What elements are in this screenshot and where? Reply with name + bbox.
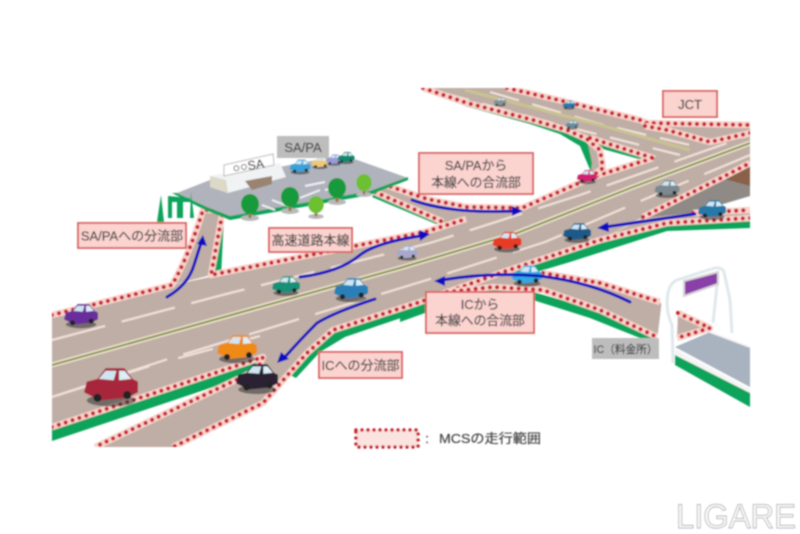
label: IC toll <box>592 338 659 359</box>
car: pink <box>577 170 597 184</box>
car: orange <box>217 335 257 363</box>
arrow: entrance <box>597 214 695 232</box>
trees <box>241 174 372 221</box>
building <box>210 163 286 193</box>
label: IC branch <box>319 352 402 378</box>
lot border <box>172 177 408 220</box>
lane markings <box>52 92 750 397</box>
parking stripes <box>262 182 345 210</box>
label: IC merge <box>426 292 534 333</box>
green verge: SA/PA exit <box>372 192 445 224</box>
car: gray <box>654 180 680 198</box>
building entrance <box>245 176 272 190</box>
green verge: JCT <box>423 88 596 172</box>
green verge: lower edge <box>290 218 750 378</box>
MCS range dotted edges <box>52 88 750 447</box>
car: red <box>492 232 522 252</box>
parking lot <box>177 155 408 217</box>
building sign: ○○SA <box>232 157 266 175</box>
label: IC branch: ICへの分流部 <box>321 358 400 373</box>
toll gate road stub <box>676 316 701 335</box>
median strip <box>52 90 750 365</box>
parked cars <box>290 152 354 175</box>
car: dark blue <box>563 223 591 243</box>
label: JCT <box>663 91 717 117</box>
car: JCT blue <box>562 100 576 110</box>
gantry <box>667 268 732 363</box>
building sign <box>224 154 274 176</box>
car: dark red <box>84 368 138 406</box>
label: SA/PA merge: 本線への合流部 <box>431 175 521 190</box>
IC merge ramp <box>474 271 662 334</box>
main road <box>52 133 750 447</box>
green verge: SA/PA ramp <box>214 225 224 272</box>
green verge: JCT branch <box>598 143 642 160</box>
car: teal <box>272 276 300 296</box>
gantry sign <box>684 272 718 296</box>
JCT loop ramp <box>587 144 600 172</box>
car: lavender <box>396 246 418 261</box>
toll plaza edge <box>675 349 750 394</box>
arrow: to SA/PA <box>167 235 207 297</box>
panel: toll gate <box>656 268 750 407</box>
green verge: main road <box>52 357 263 441</box>
car: JCT steel <box>566 120 578 130</box>
car: cyan <box>512 266 542 287</box>
label: SA/PA branch: SA/PAへの分流部 <box>81 228 183 244</box>
label: SA/PA merge <box>419 153 533 194</box>
cypress hedge <box>157 192 194 222</box>
embankment <box>650 178 751 218</box>
label: IC toll: IC（料金所） <box>594 342 658 356</box>
legend <box>356 430 541 447</box>
car: black <box>236 364 278 394</box>
arrow: IC merge <box>434 275 630 302</box>
label: SA/PA <box>277 136 329 158</box>
gantry pillar shield <box>656 293 674 363</box>
panel: SA/PA facility <box>157 152 408 222</box>
SA/PA exit road <box>380 188 494 223</box>
car: blue <box>334 278 368 302</box>
blue flow arrows <box>167 200 695 363</box>
arrow: to IC <box>277 299 375 363</box>
cars on road <box>64 97 726 406</box>
label: expressway main line: 高速道路本線 <box>271 233 350 248</box>
green verge: IC ramp <box>400 288 657 338</box>
legend: MCSの走行範囲 <box>439 431 541 446</box>
panel: road scene <box>52 88 750 447</box>
car: purple <box>64 304 98 328</box>
label: IC merge: 本線への合流部 <box>435 313 525 328</box>
JCT road <box>423 88 750 157</box>
label: SA/PA merge: SA/PAから <box>445 158 507 173</box>
car: blue right <box>698 200 726 220</box>
legend: : <box>425 431 429 446</box>
arrow: SA/PA merge <box>412 200 523 216</box>
label: expressway main line <box>269 228 352 252</box>
label: IC merge: ICから <box>461 297 499 312</box>
arrow: main line <box>300 230 430 277</box>
entrance ramp from right <box>614 212 751 234</box>
label: SA/PA: SA/PA <box>284 140 322 155</box>
toll plaza surface <box>675 332 750 387</box>
SA/PA access ramp <box>176 212 219 284</box>
label: SA/PA branch <box>78 223 186 248</box>
label: JCT: JCT <box>678 97 702 112</box>
car: JCT gray <box>494 97 506 107</box>
toll plaza verge <box>675 355 750 407</box>
